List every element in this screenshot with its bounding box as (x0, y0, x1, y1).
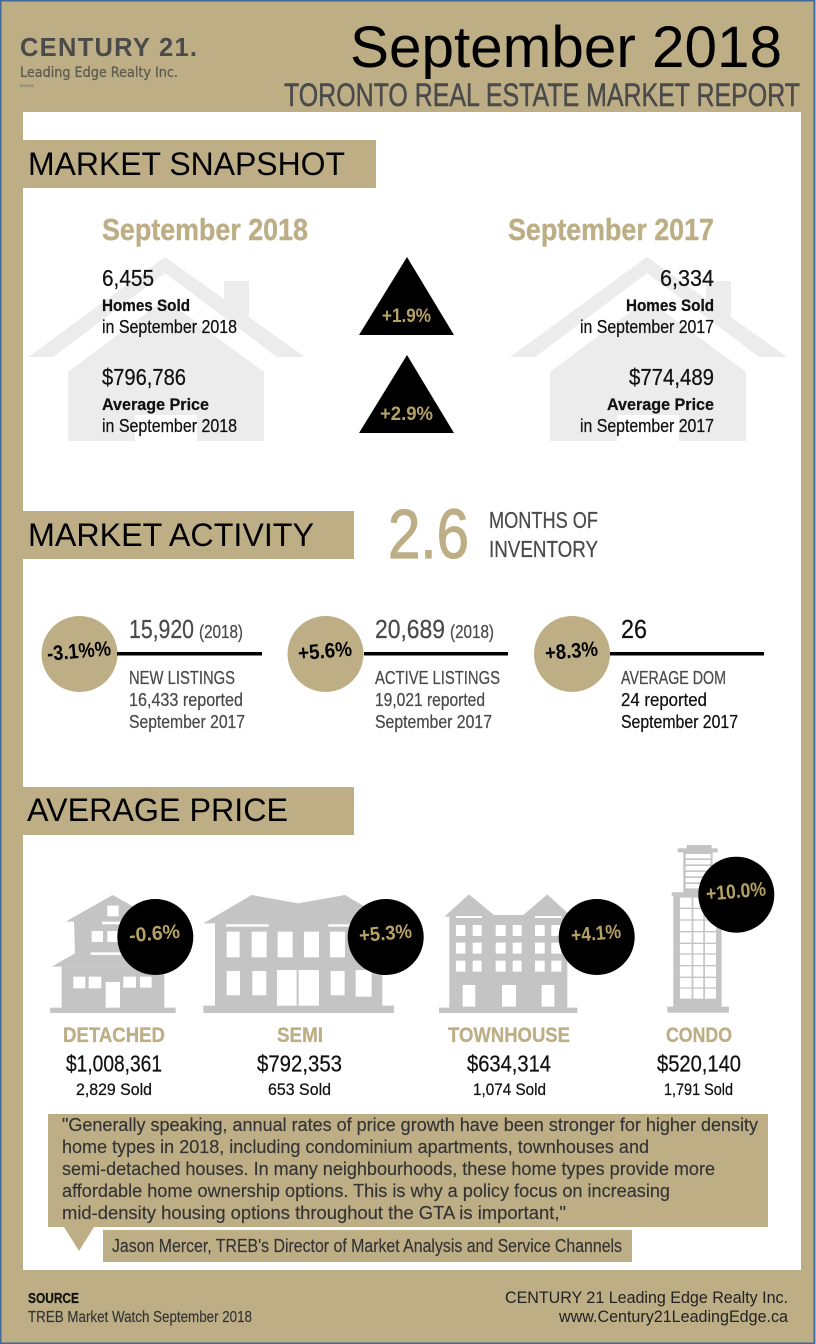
company contact (505, 1288, 789, 1326)
column: September 2018: $796,786 (102, 364, 186, 390)
source: SOURCE (28, 1290, 79, 1307)
logo: CENTURY 21. (20, 34, 197, 62)
column: September 2017: in September 2017 (580, 317, 714, 337)
badge: detached change: -0.6% (128, 921, 181, 947)
source (28, 1290, 252, 1326)
triangle: average price change (359, 355, 454, 433)
callout: quote: home types in 2018, including condominium apartments, townhouses and (62, 1136, 649, 1157)
column: September 2018: in September 2018 (102, 416, 237, 436)
badge: townhouse change (559, 899, 635, 975)
panel: market snapshot (23, 140, 787, 441)
months of inventory (388, 495, 598, 573)
triangle: homes sold change: +1.9% (382, 306, 431, 327)
label: condo: CONDO (666, 1023, 732, 1047)
icon: townhouse (439, 894, 577, 1013)
logo (20, 34, 197, 88)
callout: attribution: Jason Mercer, TREB's Director of Market Analysis and Service Channels (112, 1236, 622, 1256)
callout: quote: mid-density housing options throughout the GTA is important," (62, 1202, 566, 1223)
label: semi: $792,353 (257, 1050, 342, 1076)
heading: market activity (23, 511, 354, 559)
label: semi: 653 Sold (268, 1080, 331, 1099)
column: September 2017: 6,334 (660, 265, 714, 291)
badge: semi change (348, 899, 424, 975)
stat: new listings: 15,920 (129, 614, 194, 644)
panel: average price (23, 787, 774, 1099)
label: condo (657, 1023, 741, 1099)
column: September 2018 (102, 212, 308, 436)
label: condo: $520,140 (657, 1050, 741, 1076)
triangle: average price change: +2.9% (380, 404, 433, 425)
company contact: www.Century21LeadingEdge.ca (558, 1307, 789, 1326)
months of inventory: INVENTORY (489, 536, 598, 562)
badge: townhouse change: +4.1% (570, 921, 622, 947)
badge: condo change (698, 857, 774, 933)
label: detached: $1,008,361 (66, 1050, 162, 1076)
stat: new listings: NEW LISTINGS (129, 668, 235, 688)
stat: active listings: +5.6% (297, 638, 353, 665)
heading: average price: AVERAGE PRICE (27, 792, 288, 828)
logo: BROKERAGE (20, 83, 34, 88)
months of inventory: MONTHS OF (489, 507, 598, 533)
heading: average price (23, 787, 354, 835)
source: TREB Market Watch September 2018 (28, 1309, 252, 1326)
callout: quote (48, 1114, 768, 1251)
stat: average DOM: 24 reported (621, 690, 707, 710)
callout: quote: "Generally speaking, annual rates of price growth have been stronger for higher density (62, 1114, 759, 1135)
label: condo: 1,791 Sold (664, 1080, 733, 1099)
stat: new listings: 16,433 reported (129, 690, 243, 710)
stat: active listings (288, 614, 508, 732)
stat: average DOM: AVERAGE DOM (621, 668, 726, 688)
stat: average DOM: +8.3% (544, 638, 599, 665)
stat: active listings: ACTIVE LISTINGS (375, 668, 500, 688)
label: townhouse: $634,314 (467, 1050, 551, 1076)
company contact: CENTURY 21 Leading Edge Realty Inc. (505, 1288, 788, 1307)
logo: Leading Edge Realty Inc. (20, 65, 178, 81)
stat: new listings: (2018) (199, 622, 243, 642)
label: semi: SEMI (277, 1023, 323, 1047)
label: townhouse (448, 1023, 570, 1099)
heading: market snapshot (23, 140, 376, 188)
icon: detached house (50, 895, 176, 1013)
stat: average DOM: September 2017 (621, 712, 738, 732)
column: September 2017: September 2017 (508, 212, 714, 247)
column: September 2017: in September 2017 (580, 416, 714, 436)
badge: detached change (117, 899, 193, 975)
triangle: homes sold change (359, 257, 454, 335)
badge: semi change: +5.3% (358, 921, 413, 947)
callout: quote: affordable home ownership options. This is why a policy focus on increasing (62, 1180, 670, 1201)
icon: condo tower (667, 845, 729, 1013)
stat: average DOM: 26 (621, 614, 647, 644)
stat: average DOM (534, 614, 764, 732)
label: detached (63, 1023, 165, 1099)
column: September 2017: Average Price (607, 395, 714, 414)
label: detached: DETACHED (63, 1023, 165, 1047)
heading: market activity: MARKET ACTIVITY (28, 517, 314, 553)
icon: house 2017 (510, 257, 787, 441)
column: September 2017 (508, 212, 714, 436)
stat: new listings (42, 614, 262, 732)
column: September 2018: September 2018 (102, 212, 308, 247)
column: September 2018: Average Price (102, 395, 209, 414)
stat: new listings: September 2017 (129, 712, 245, 732)
months of inventory: 2.6 (388, 495, 469, 573)
column: September 2017: Homes Sold (626, 296, 714, 315)
badge: condo change: +10.0% (705, 878, 767, 906)
column: September 2018: Homes Sold (102, 296, 190, 315)
label: townhouse: 1,074 Sold (473, 1080, 546, 1099)
callout: attribution (103, 1230, 632, 1262)
stat: active listings: 19,021 reported (375, 690, 485, 710)
stat: active listings: September 2017 (375, 712, 492, 732)
label: semi (257, 1023, 342, 1099)
stat: active listings: (2018) (450, 622, 494, 642)
column: September 2018: 6,455 (102, 265, 154, 291)
label: townhouse: TOWNHOUSE (448, 1023, 570, 1047)
icon: house 2018 (28, 257, 305, 441)
panel: market activity (23, 495, 764, 732)
heading: market snapshot: MARKET SNAPSHOT (28, 146, 345, 182)
column: September 2017: $774,489 (629, 364, 714, 390)
stat: new listings: -3.1%% (46, 637, 112, 666)
icon: semi house (203, 895, 394, 1013)
stat: active listings: 20,689 (375, 614, 445, 644)
callout: quote: semi-detached houses. In many neighbourhoods, these home types provide more (62, 1158, 715, 1179)
column: September 2018: in September 2018 (102, 317, 237, 337)
title: September 2018 (350, 15, 782, 80)
label: detached: 2,829 Sold (76, 1080, 152, 1099)
